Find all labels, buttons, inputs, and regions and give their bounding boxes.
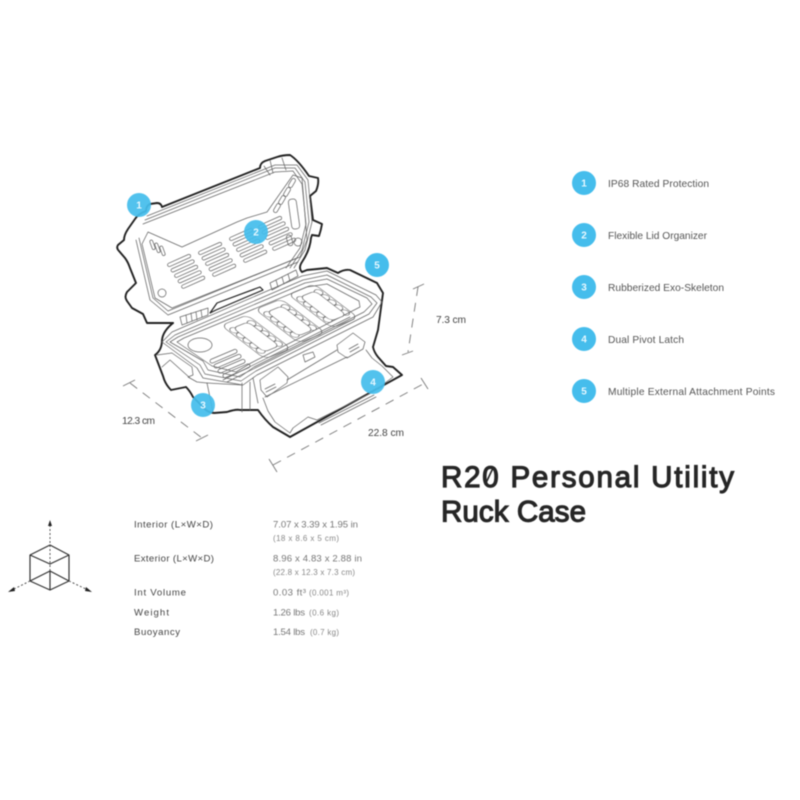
marker 3: 3 bbox=[200, 400, 206, 412]
spec: buoyancy: 1.54 lbs bbox=[273, 627, 305, 638]
spec: interior volume bbox=[134, 588, 349, 598]
spec: interior bbox=[134, 520, 358, 543]
spec: buoyancy bbox=[134, 627, 339, 638]
marker 5 bbox=[365, 253, 389, 277]
specifications table bbox=[134, 520, 362, 638]
latch door bbox=[263, 350, 393, 433]
spec: buoyancy: (0.7 kg) bbox=[310, 628, 339, 637]
feature 3: Rubberized Exo-Skeleton bbox=[608, 283, 724, 294]
spec: interior volume: 0.03 ft³ bbox=[273, 588, 306, 598]
feature 4: Dual Pivot Latch bbox=[608, 335, 684, 346]
dimension: width 12.3 cm: 12.3 cm bbox=[122, 416, 155, 427]
feature 5 bbox=[572, 379, 775, 403]
marker 1 bbox=[127, 193, 151, 217]
feature 5: Multiple External Attachment Points bbox=[608, 387, 775, 398]
dimension: height 7.3 cm bbox=[402, 284, 466, 355]
dimension: height 7.3 cm: 7.3 cm bbox=[436, 315, 466, 326]
spec: interior volume: (0.001 m³) bbox=[309, 588, 349, 598]
marker 2 bbox=[244, 220, 268, 244]
spec: weight bbox=[134, 608, 339, 618]
illustration: open R20 case bbox=[117, 155, 402, 437]
marker 5: 5 bbox=[374, 260, 380, 272]
dimension: width 12.3 cm bbox=[122, 380, 208, 441]
feature 4 bbox=[572, 327, 684, 351]
marker 2: 2 bbox=[253, 228, 259, 238]
title bbox=[441, 461, 734, 528]
feature 4: 4 bbox=[581, 334, 587, 346]
marker 4 bbox=[361, 370, 385, 394]
marker 4: 4 bbox=[370, 378, 376, 388]
case base bbox=[155, 268, 402, 437]
feature list bbox=[572, 171, 775, 403]
feature 3 bbox=[572, 275, 724, 299]
spec: exterior: 8.96 x 4.83 x 2.88 in bbox=[273, 554, 362, 564]
case lid bbox=[117, 155, 322, 325]
feature 5: 5 bbox=[581, 386, 587, 398]
spec: buoyancy: Buoyancy bbox=[134, 627, 180, 638]
icon: dimension cube bbox=[8, 520, 92, 592]
spec: exterior: (22.8 x 12.3 x 7.3 cm) bbox=[273, 568, 355, 577]
feature 1 bbox=[572, 171, 709, 195]
marker 3 bbox=[191, 393, 215, 417]
feature 2: 2 bbox=[581, 230, 587, 242]
spec: interior volume: Int Volume bbox=[134, 588, 186, 598]
feature 1: 1 bbox=[581, 178, 587, 190]
title: R20 Personal Utility bbox=[441, 461, 734, 494]
feature 2: Flexible Lid Organizer bbox=[608, 231, 708, 242]
spec: interior: (18 x 8.6 x 5 cm) bbox=[273, 534, 339, 543]
feature 2 bbox=[572, 223, 708, 247]
spec: exterior bbox=[134, 554, 362, 577]
feature 3: 3 bbox=[581, 282, 587, 294]
title: Ruck Case bbox=[441, 496, 586, 528]
spec: weight: (0.6 kg) bbox=[309, 608, 339, 618]
dimension: length 22.8 cm bbox=[269, 378, 428, 472]
marker 1: 1 bbox=[136, 200, 142, 212]
dimension: length 22.8 cm: 22.8 cm bbox=[368, 428, 404, 439]
feature 1: IP68 Rated Protection bbox=[608, 179, 709, 190]
spec: interior: 7.07 x 3.39 x 1.95 in bbox=[273, 520, 358, 530]
spec: interior: Interior (L×W×D) bbox=[134, 520, 213, 530]
spec: weight: Weight bbox=[134, 608, 169, 618]
spec: exterior: Exterior (L×W×D) bbox=[134, 554, 214, 564]
spec: weight: 1.26 lbs bbox=[273, 608, 305, 618]
